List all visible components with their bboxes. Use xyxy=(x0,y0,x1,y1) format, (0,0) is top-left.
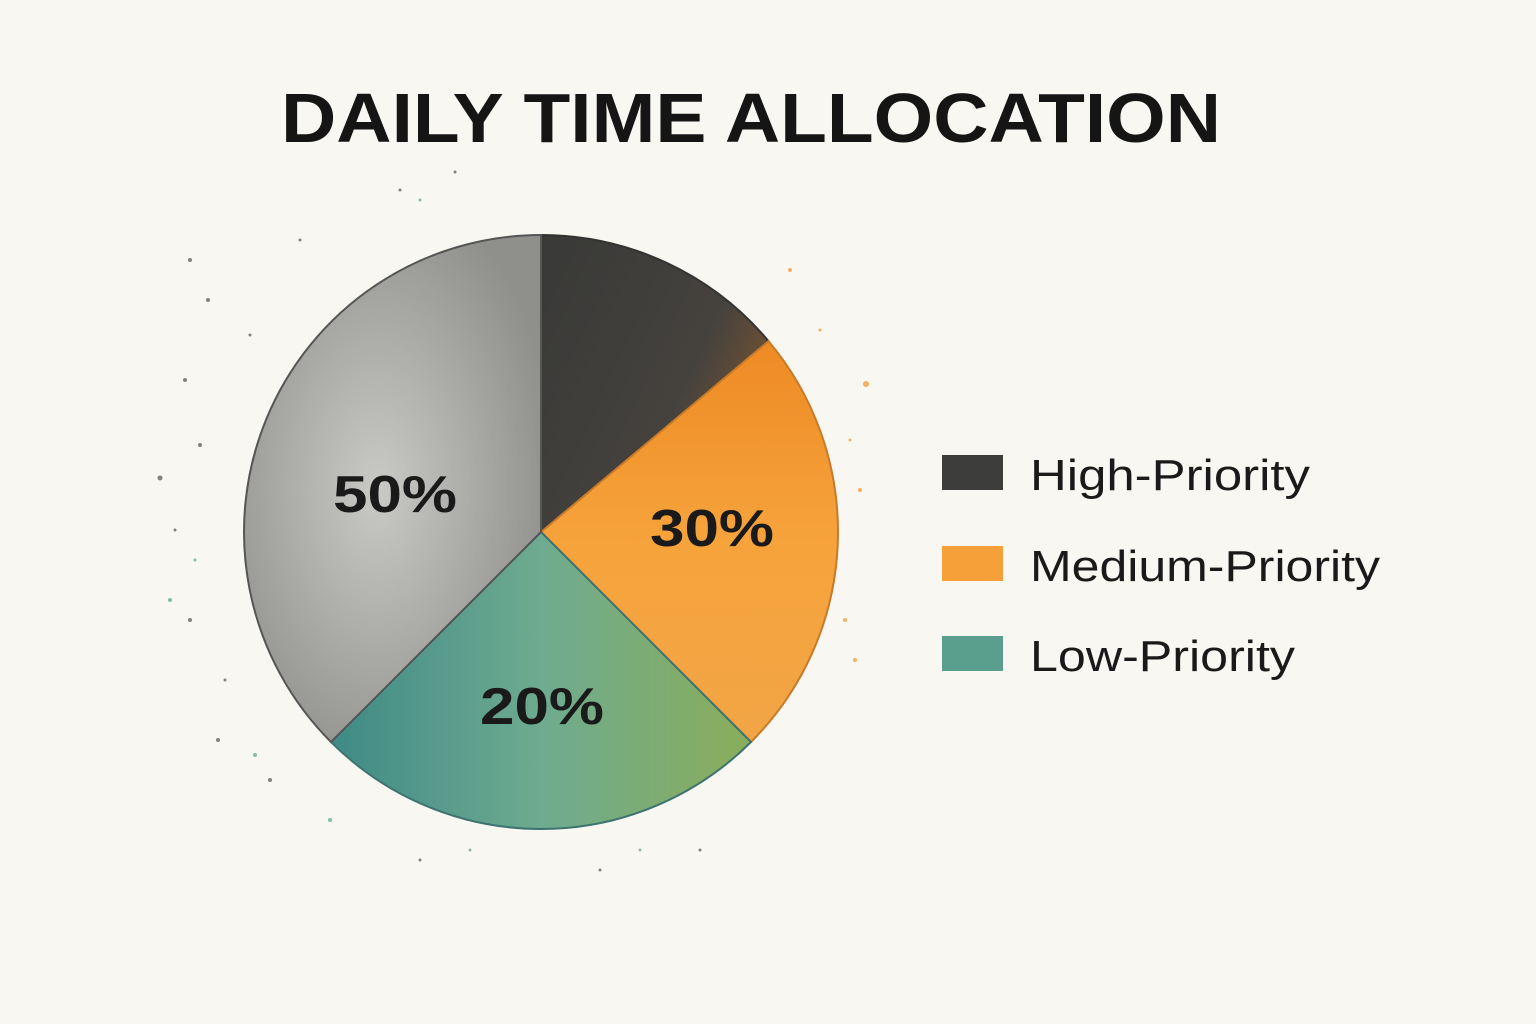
slice: medium-priority xyxy=(541,341,838,742)
slice: low-priority xyxy=(331,532,751,829)
legend item: low-priority xyxy=(942,632,1295,681)
slice: other xyxy=(244,235,541,742)
label 50%: 50% xyxy=(333,466,457,524)
speckles xyxy=(158,170,702,872)
slice: high-priority xyxy=(541,235,768,532)
pie chart xyxy=(244,235,838,829)
legend item: low-priority: Low-Priority xyxy=(1030,632,1295,681)
title: DAILY TIME ALLOCATION xyxy=(281,79,1221,157)
label 20%: 20% xyxy=(480,678,604,736)
legend xyxy=(942,451,1380,681)
legend item: medium-priority: Medium-Priority xyxy=(1030,542,1380,591)
legend item: high-priority: High-Priority xyxy=(1030,451,1310,500)
label 30%: 30% xyxy=(650,500,774,558)
legend item: high-priority xyxy=(942,451,1310,500)
